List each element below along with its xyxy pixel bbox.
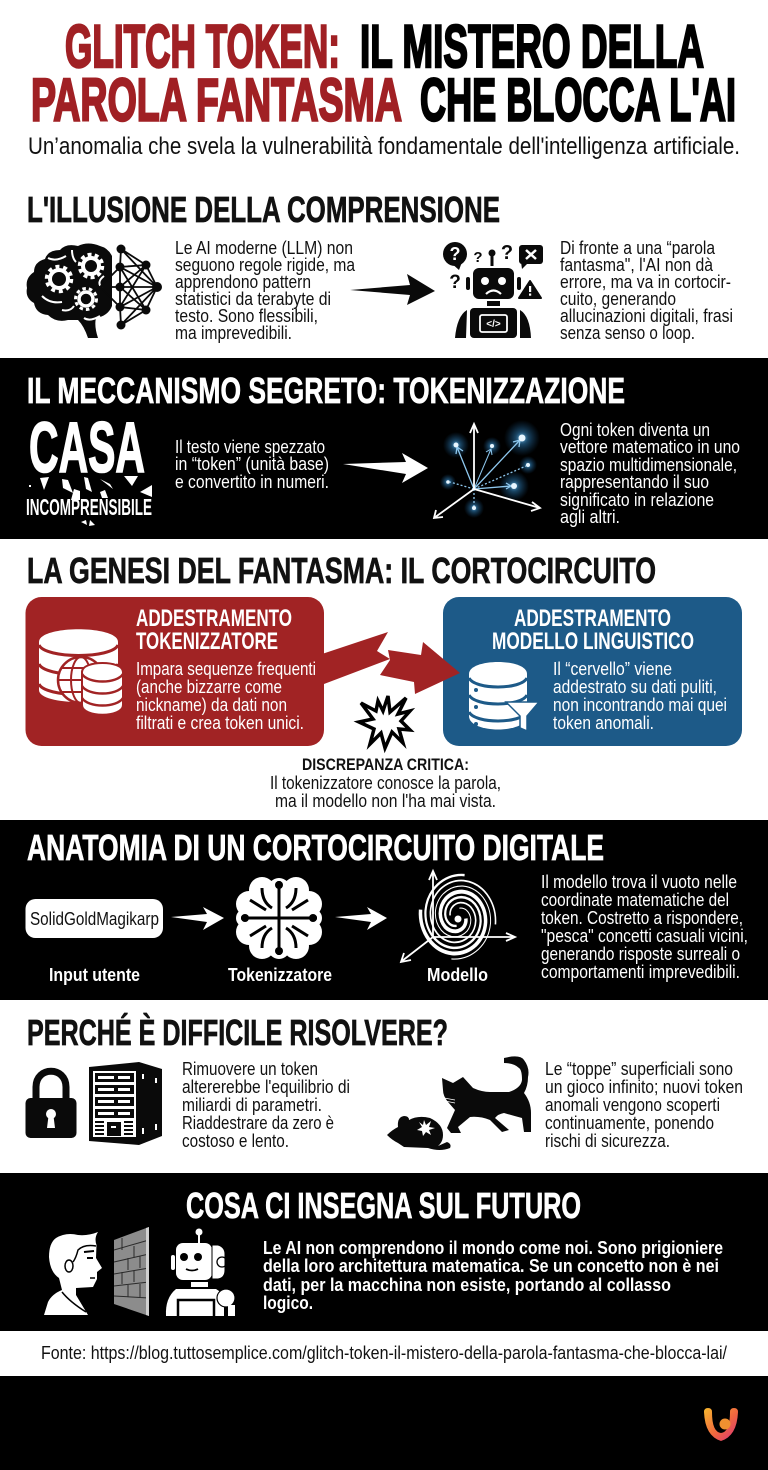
text: vettore: vettore matematico in uno <box>560 437 740 457</box>
text: vuoto <box>541 872 748 982</box>
text: parola fantasma: allucinazioni digitali, frasi <box>560 306 733 326</box>
title <box>31 13 736 134</box>
icon: confused robot: </> <box>486 319 501 330</box>
card text: addestrato su dati puliti, <box>553 677 717 697</box>
text: vuoto: comportamenti imprevedibili. <box>541 962 740 982</box>
card text: (anche bizzarre come <box>136 677 282 697</box>
callout: discrepanza critica: DISCREPANZA CRITICA: <box>302 755 469 774</box>
text: LLM: apprendono pattern <box>175 272 311 292</box>
text: LLM: seguono regole rigide, ma <box>175 255 356 275</box>
card text: Il “cervello” viene <box>553 659 672 679</box>
text: vettore <box>560 420 740 527</box>
text: token: in “token” (unità base) <box>175 454 329 474</box>
card: addestramento modello linguistico <box>443 597 742 746</box>
icon: confused robot: ? <box>450 244 460 264</box>
text: vettore: spazio multidimensionale, <box>560 455 737 475</box>
text: vuoto: Il modello trova il vuoto nelle <box>541 872 737 892</box>
icon: server tower <box>89 1062 162 1145</box>
step labels: Tokenizzatore <box>228 965 332 985</box>
text: parola fantasma: Di fronte a una “parola <box>560 238 716 258</box>
callout: discrepanza critica: ma il modello non l'ha mai vista. <box>275 791 496 811</box>
text: token: Il testo viene spezzato <box>175 437 325 457</box>
text: parametri: miliardi di parametri. <box>182 1095 322 1115</box>
title: GLITCH TOKEN: <box>65 13 340 80</box>
icon: confused robot: ? <box>473 249 483 266</box>
icon: brick wall <box>114 1227 149 1316</box>
text: LLM: testo. Sono flessibili, <box>175 306 318 326</box>
icon: brain with gears and network <box>27 244 162 338</box>
text: lezione: dati, per la macchina non esiste, portando al collasso <box>263 1275 671 1295</box>
text: toppe <box>545 1059 743 1151</box>
arrow: broken lightning <box>322 632 460 694</box>
text: parametri: altererebbe l'equilibrio di <box>182 1077 350 1097</box>
card heading: TOKENIZZATORE <box>136 628 278 655</box>
icon: logo <box>704 1408 738 1441</box>
text: toppe: anomali vengono scoperti <box>545 1095 720 1115</box>
card text: token anomali. <box>553 713 654 733</box>
text: vuoto: generando risposte surreali o <box>541 944 740 964</box>
text: parametri: costoso e lento. <box>182 1131 289 1151</box>
text: toppe: continuamente, ponendo <box>545 1113 714 1133</box>
card heading <box>492 605 694 655</box>
callout: discrepanza critica: Il tokenizzatore conosce la parola, <box>270 773 501 793</box>
heading: L'ILLUSIONE DELLA COMPRENSIONE <box>27 189 500 230</box>
panel: anatomia di un cortocircuito digitale <box>0 820 768 1000</box>
arrow <box>350 274 435 305</box>
text: toppe: rischi di sicurezza. <box>545 1131 670 1151</box>
card heading: ADDESTRAMENTO <box>514 605 671 632</box>
icon: database with funnel <box>469 662 539 731</box>
icon: database with globe <box>39 629 123 715</box>
title: PAROLA FANTASMA <box>31 66 402 134</box>
panel: la genesi del fantasma <box>26 550 742 811</box>
card text: non incontrando mai quei <box>553 695 727 715</box>
icon: black hole on axes <box>401 869 515 965</box>
icon: padlock <box>26 1071 76 1138</box>
input box: SolidGoldMagikarp <box>30 909 159 929</box>
text: toppe: Le “toppe” superficiali sono <box>545 1059 733 1079</box>
footer band <box>0 1376 768 1470</box>
text: vettore: rappresentando il suo <box>560 472 709 492</box>
panel: l'illusione della comprensione <box>27 189 733 343</box>
step labels: Modello <box>427 965 488 985</box>
text: LLM: statistici da terabyte di <box>175 289 331 309</box>
arrow <box>335 907 387 930</box>
text: token <box>175 437 329 492</box>
icon: CASA breaking apart: INCOMPRENSIBILE <box>26 494 152 520</box>
callout: discrepanza critica <box>270 755 501 811</box>
text: token: e convertito in numeri. <box>175 472 329 492</box>
icon: cat and mouse <box>387 1056 531 1150</box>
step labels: Input utente <box>49 965 140 985</box>
input box <box>26 899 163 938</box>
card heading: MODELLO LINGUISTICO <box>492 628 694 655</box>
text: parametri: Rimuovere un token <box>182 1059 318 1079</box>
arrow <box>171 907 224 930</box>
card text: Impara sequenze frequenti <box>136 659 316 679</box>
card heading <box>136 605 292 655</box>
icon: collision burst <box>359 696 410 748</box>
card text: nickname) da dati non <box>136 695 287 715</box>
icon: confused robot: ? <box>449 272 461 293</box>
text: lezione: logico. <box>263 1293 313 1313</box>
text: parola fantasma: senza senso o loop. <box>560 323 695 343</box>
icon: CASA breaking apart: CASA <box>29 409 145 488</box>
text: vettore: Ogni token diventa un <box>560 420 710 440</box>
text: parola fantasma <box>560 238 733 343</box>
icon: confused robot <box>443 242 543 338</box>
card heading: ADDESTRAMENTO <box>136 605 292 632</box>
text: LLM <box>175 238 356 343</box>
arrow <box>343 453 428 483</box>
text: vettore: agli altri. <box>560 507 620 527</box>
heading: COSA CI INSEGNA SUL FUTURO <box>186 1185 581 1226</box>
panel: cosa ci insegna sul futuro <box>0 1173 768 1331</box>
icon: CASA breaking apart <box>26 409 152 526</box>
card: addestramento tokenizzatore <box>26 597 324 746</box>
text: vettore: significato in relazione <box>560 490 714 510</box>
text: parametri <box>182 1059 350 1151</box>
text: lezione <box>263 1238 723 1313</box>
icon: confused robot: ? <box>501 242 513 264</box>
icon: robot <box>166 1228 235 1316</box>
card text <box>136 659 316 733</box>
text: parola fantasma: cuito, generando <box>560 289 676 309</box>
text: vuoto: coordinate matematiche del <box>541 890 729 910</box>
text: parametri: Riaddestrare da zero è <box>182 1113 334 1133</box>
text: LLM: ma imprevedibili. <box>175 323 292 343</box>
text: parola fantasma: fantasma", l'AI non dà <box>560 255 714 275</box>
chart: vector space <box>434 420 540 518</box>
text: lezione: della loro architettura matematica. Se un concetto non è nei <box>263 1256 719 1276</box>
panel: perché è difficile risolvere <box>26 1012 743 1151</box>
card text: filtrati e crea token unici. <box>136 713 304 733</box>
text: parola fantasma: errore, ma va in cortocir- <box>560 272 731 292</box>
text: toppe: un gioco infinito; nuovi token <box>545 1077 743 1097</box>
card text <box>553 659 727 733</box>
step labels <box>49 965 488 985</box>
panel: il meccanismo segreto <box>0 358 768 539</box>
icon: tokenizer brain <box>236 877 322 959</box>
icon: human profile <box>44 1232 102 1315</box>
heading: PERCHÉ È DIFFICILE RISOLVERE? <box>27 1012 448 1053</box>
text: LLM: Le AI moderne (LLM) non <box>175 238 353 258</box>
